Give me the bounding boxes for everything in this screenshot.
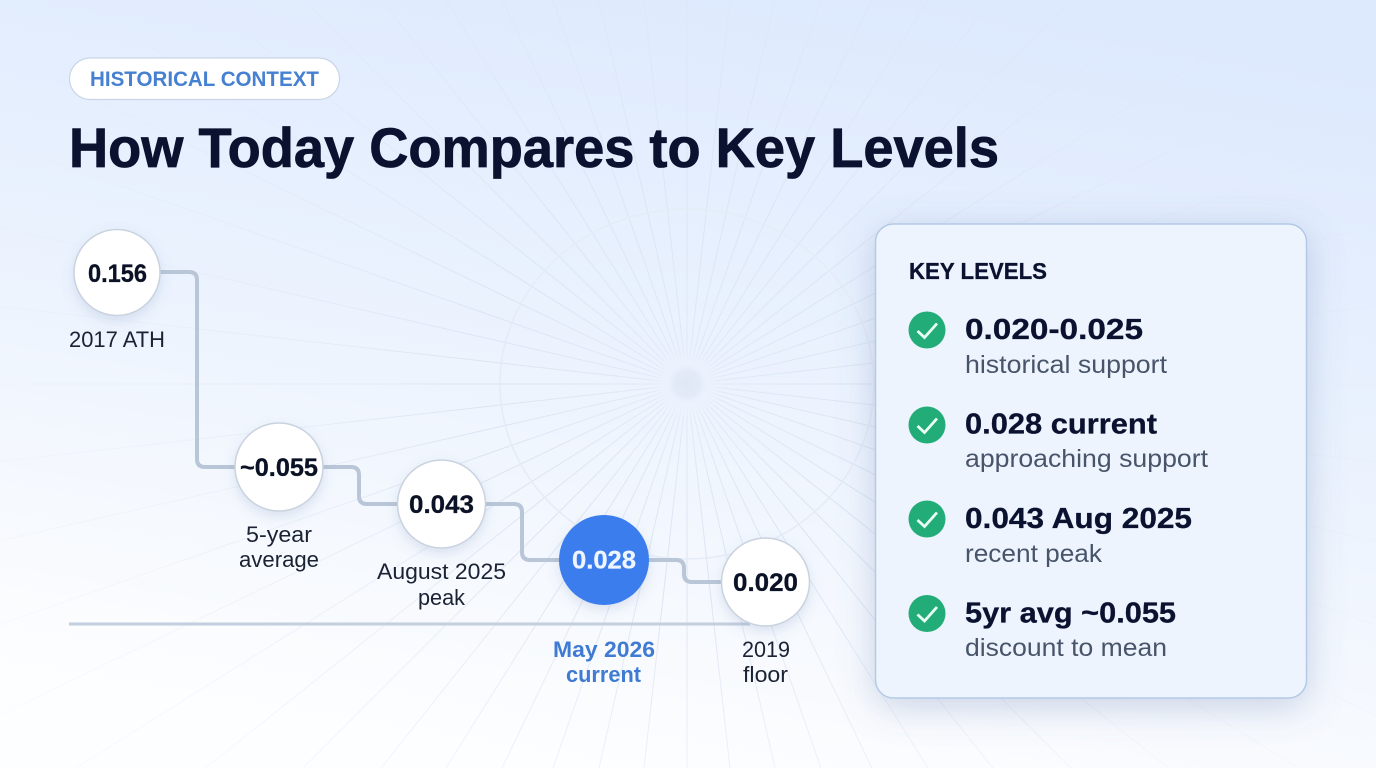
node: August 2025 peak: peak (418, 585, 466, 610)
node: 5-year average: 5-year (246, 522, 313, 547)
level: historical support (908, 312, 1167, 379)
node: 5-year average (235, 423, 323, 572)
node: 5-year average: average (239, 547, 319, 572)
node: 2019 floor: 0.020 (733, 569, 798, 597)
level: approaching support: approaching support (965, 445, 1208, 473)
level: discount to mean: 5yr avg ~0.055 (965, 598, 1176, 630)
node: May 2026 current (553, 515, 655, 687)
node: 2019 floor: 2019 (742, 637, 790, 662)
node: May 2026 current: 0.028 (572, 546, 636, 574)
panel heading: KEY LEVELS (909, 258, 1047, 284)
background radial rays (194, 96, 1067, 768)
node: May 2026 current: current (566, 662, 641, 687)
level: recent peak (908, 500, 1192, 568)
level: historical support: 0.020-0.025 (965, 314, 1143, 346)
level: recent peak: 0.043 Aug 2025 (965, 503, 1192, 535)
node: 2019 floor: floor (743, 662, 789, 687)
stepped connector line (160, 272, 722, 582)
level: approaching support (908, 406, 1208, 473)
pill badge: historical context (70, 58, 340, 100)
background hub glow (666, 363, 708, 405)
panel: key levels (876, 224, 1306, 698)
level: discount to mean: discount to mean (965, 634, 1167, 662)
node: August 2025 peak: 0.043 (409, 491, 474, 519)
pill badge: historical context: HISTORICAL CONTEXT (90, 68, 319, 91)
node: 2019 floor (722, 538, 810, 687)
node: 2017 ATH: 0.156 (88, 260, 147, 288)
node: 2017 ATH (69, 230, 165, 352)
node: May 2026 current: May 2026 (553, 637, 655, 662)
baseline axis (69, 622, 750, 626)
level: approaching support: 0.028 current (965, 408, 1157, 440)
node: August 2025 peak: August 2025 (377, 559, 506, 584)
level: historical support: historical support (965, 351, 1167, 379)
node: 2017 ATH: 2017 ATH (69, 327, 165, 352)
node: August 2025 peak (377, 460, 506, 610)
title: How Today Compares to Key Levels (69, 116, 999, 179)
level: recent peak: recent peak (965, 540, 1103, 568)
node: 5-year average: ~0.055 (240, 454, 318, 482)
level: discount to mean (908, 595, 1176, 662)
